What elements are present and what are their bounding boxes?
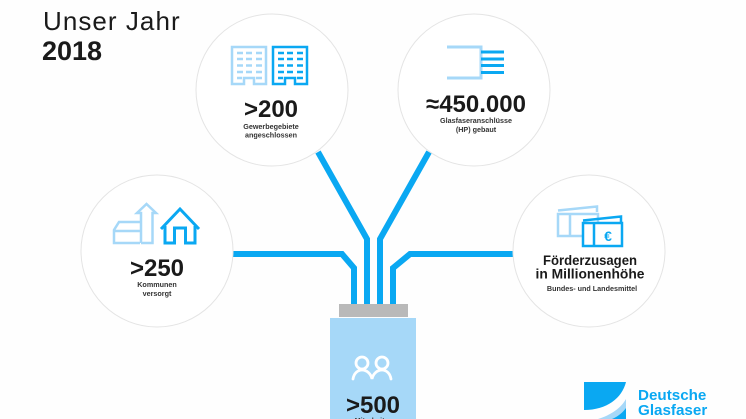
logo text: Deutsche	[638, 387, 706, 404]
icon: people	[353, 357, 391, 379]
label: Glasfaseranschlüsse (HP) gebaut: Glasfaseranschlüsse	[440, 116, 512, 125]
heading: Förderzusagen in Millionenhöhe	[536, 252, 645, 282]
label: Kommunen versorgt: Kommunen	[137, 280, 177, 289]
logo mark	[584, 382, 626, 419]
panel: Mitarbeiter	[330, 318, 416, 419]
logo text	[638, 387, 707, 419]
icon: light building	[232, 47, 266, 84]
label: Bundes- und Landesmittel: Bundes- und Landesmittel	[547, 284, 637, 293]
figure: 200: >200	[244, 96, 298, 123]
title: 2018	[42, 36, 102, 66]
label: Kommunen versorgt: versorgt	[143, 289, 172, 298]
logo	[584, 382, 707, 419]
connector plug	[339, 304, 408, 317]
icon: dark building	[273, 47, 307, 84]
icon: house	[161, 209, 199, 243]
figure: 250: >250	[130, 255, 184, 282]
icon: barn	[114, 204, 156, 243]
label: Glasfaseranschlüsse (HP) gebaut: (HP) gebaut	[456, 125, 497, 134]
icon: dark banknote: €	[604, 228, 612, 244]
title: Unser Jahr	[43, 6, 181, 36]
heading: Förderzusagen in Millionenhöhe: Förderzusagen	[543, 252, 637, 268]
label: Gewerbegebiete angeschlossen	[243, 122, 299, 140]
panel: Gewerbegebiete	[196, 14, 348, 166]
label: Gewerbegebiete angeschlossen: Gewerbegebiete	[243, 122, 299, 131]
icon: dark banknote	[583, 216, 622, 246]
label: Kommunen versorgt	[137, 280, 177, 298]
label: Glasfaseranschlüsse (HP) gebaut	[440, 116, 512, 134]
icon: fibre connector	[447, 47, 504, 78]
label: Gewerbegebiete angeschlossen: angeschlossen	[245, 130, 297, 140]
fiber lines	[233, 152, 513, 304]
panel: Kommunen	[81, 175, 233, 327]
figure: 450.000: ≈450.000	[426, 91, 526, 118]
figure: 500: >500	[346, 392, 400, 419]
panel: Glasfaseranschlüsse	[398, 14, 550, 166]
icon: light banknote	[558, 206, 598, 236]
title	[42, 6, 181, 66]
panel: Förderzusagen	[513, 175, 665, 327]
logo text: Glasfaser	[638, 402, 707, 419]
heading: Förderzusagen in Millionenhöhe: in Millionenhöhe	[536, 266, 645, 282]
